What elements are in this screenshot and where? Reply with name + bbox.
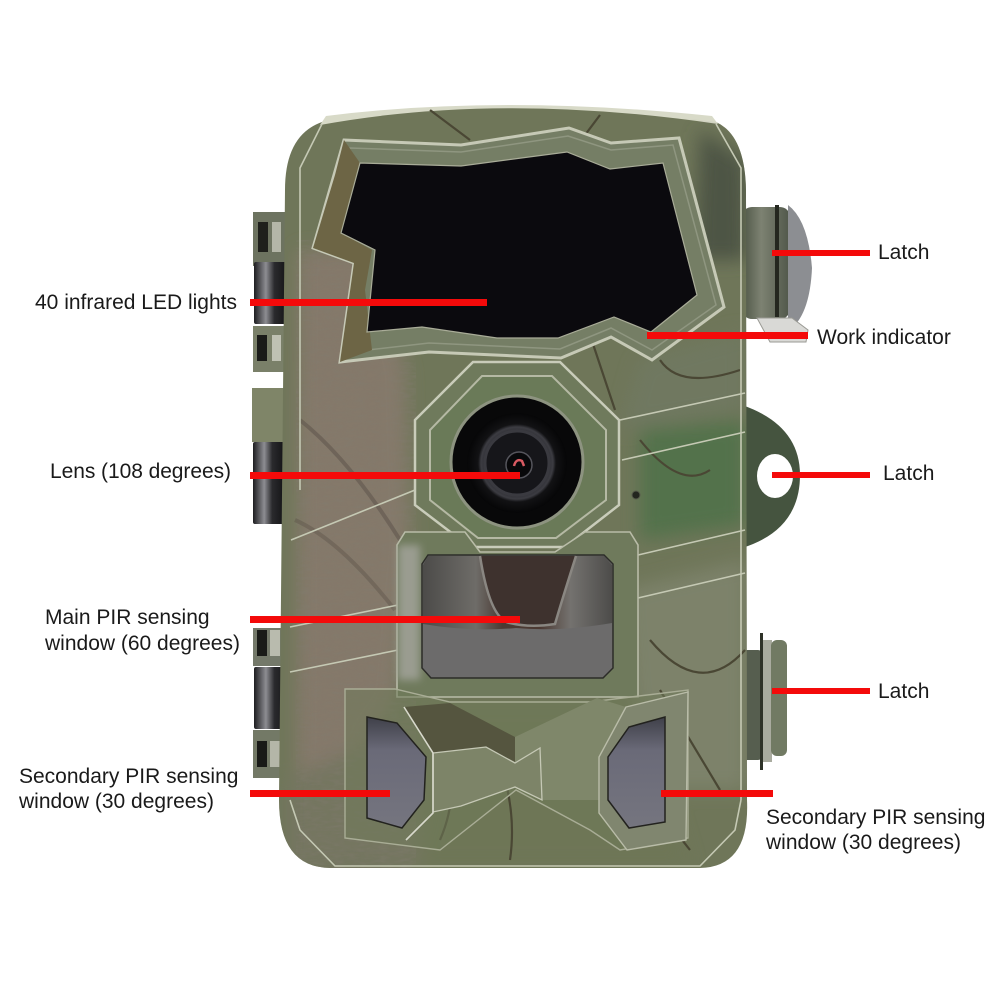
branch lines: [295, 110, 745, 860]
line: right secondary PIR: [661, 790, 773, 797]
label: right secondary PIR window: window (30 degrees): [765, 831, 961, 854]
label: Lens: Lens (108 degrees): [50, 460, 231, 483]
left secondary window: [367, 717, 426, 828]
callout lines: [250, 250, 870, 797]
right window surround: [599, 692, 688, 850]
inner octagon: [430, 376, 606, 538]
camouflage patches: [285, 130, 747, 870]
frame inner line: [325, 136, 716, 352]
center X shape: [433, 747, 542, 812]
line: top latch: [772, 250, 870, 256]
LED window: [341, 152, 697, 338]
camera body with camouflage: [279, 105, 747, 870]
line: main PIR: [250, 616, 520, 623]
PIR lens: [422, 555, 613, 678]
label: Work indicator: Work indicator: [817, 326, 951, 349]
panel outline: [345, 689, 688, 850]
PIR frame: [397, 532, 638, 697]
lens glass: [467, 413, 567, 513]
right top latch: [742, 205, 812, 342]
reflection arch: [480, 556, 576, 626]
lens assembly: [415, 362, 619, 547]
line: LED lights: [250, 299, 487, 306]
label: bottom latch: Latch: [878, 680, 929, 703]
LED frame: [313, 128, 724, 362]
infrared LED panel: [313, 128, 724, 362]
lower PIR panel: [345, 689, 688, 850]
line: lens: [250, 472, 520, 479]
label: right secondary PIR window: Secondary PIR sensing: [766, 806, 985, 829]
light ridge: [515, 698, 626, 800]
left window edge: [404, 707, 433, 840]
label: left secondary PIR window: window (30 degrees): [18, 790, 214, 813]
main PIR window: [397, 532, 638, 697]
dark valley: [404, 703, 515, 762]
microphone hole: [632, 491, 640, 499]
outer octagon housing: [415, 362, 619, 547]
bark texture: [296, 240, 416, 870]
label: Main PIR sensing window: Main PIR sensing: [45, 606, 210, 629]
line: left secondary PIR: [250, 790, 390, 797]
label: middle latch: Latch: [883, 462, 934, 485]
line: middle latch: [772, 472, 870, 478]
line: work indicator: [647, 332, 808, 339]
label: top latch: Latch: [878, 241, 929, 264]
line: bottom latch: [772, 688, 870, 694]
label: left secondary PIR window: Secondary PIR sensing: [19, 765, 238, 788]
lens barrel: [451, 396, 583, 528]
rear mounting plate with hole: [742, 405, 800, 548]
label: 40 infrared LED lights: 40 infrared LED lights: [35, 291, 237, 314]
right secondary window: [608, 717, 665, 828]
label: Main PIR sensing window: window (60 degrees): [44, 632, 240, 655]
right bottom latch: [742, 633, 787, 770]
left hinges and clips: [252, 212, 289, 778]
top light edge: [320, 105, 718, 125]
body panel seams: [290, 124, 745, 866]
